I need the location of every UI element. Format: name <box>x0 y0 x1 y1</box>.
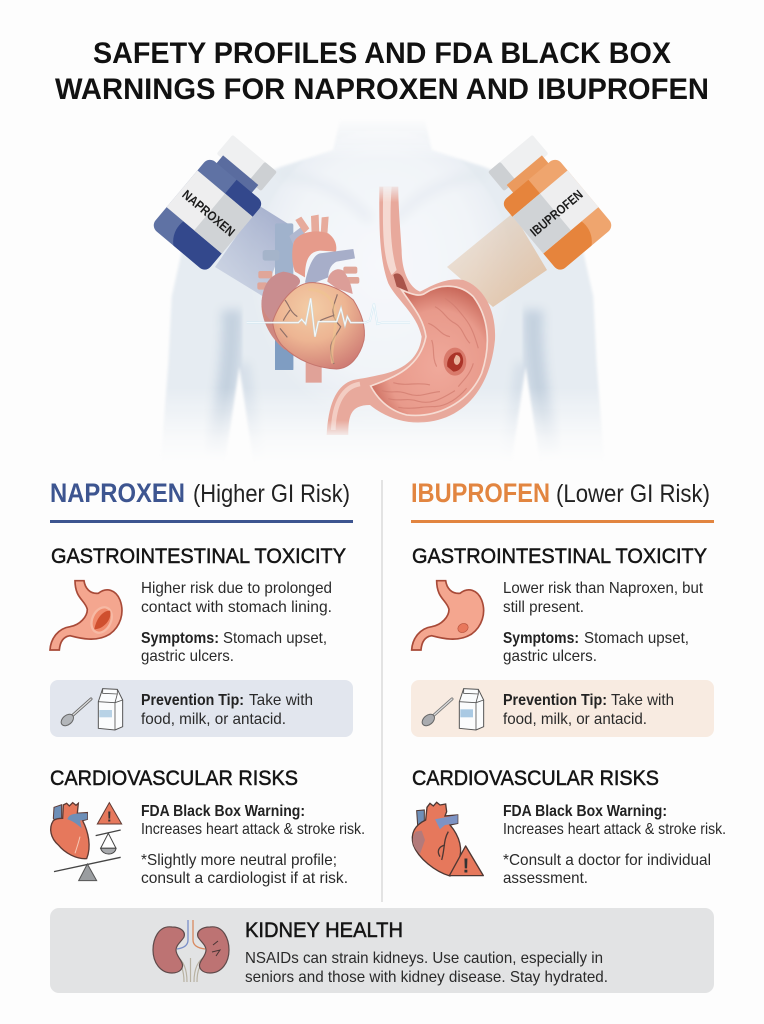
icon: heart, warning and balance scale: ! <box>107 810 112 826</box>
body text: symptoms: Symptoms: <box>503 630 579 647</box>
body text: symptoms: Symptoms: <box>141 630 219 647</box>
ibuprofen bottle: IBUPROFEN <box>527 187 586 239</box>
note text: consult a cardiologist if at risk. <box>141 870 348 887</box>
icon: heart with warning: ! <box>463 855 469 878</box>
tip text: Take with <box>611 692 674 709</box>
warning text: Increases heart attack & stroke risk. <box>141 821 365 838</box>
naproxen rule <box>50 520 353 523</box>
body text: risk: still present. <box>503 599 584 616</box>
body text: risk: Lower risk than Naproxen, but <box>503 580 704 597</box>
kidney heading: KIDNEY HEALTH <box>245 919 403 942</box>
panel: kidney health <box>50 908 714 993</box>
heading: gastrointestinal toxicity: GASTROINTESTINAL TOXICITY <box>412 545 707 568</box>
center divider <box>382 480 383 902</box>
heading: ibuprofen: IBUPROFEN <box>411 478 550 508</box>
kidney text: seniors and those with kidney disease. Stay hydrated. <box>245 969 608 986</box>
anatomical heart <box>247 215 410 383</box>
body text: symptoms: gastric ulcers. <box>503 648 597 665</box>
kidney text: NSAIDs can strain kidneys. Use caution, especially in <box>245 950 603 967</box>
tip text <box>141 692 313 728</box>
body text: risk <box>141 580 332 616</box>
tip text: Take with <box>249 692 313 709</box>
body text: symptoms: Stomach upset, <box>223 630 327 647</box>
note text: *Consult a doctor for individual <box>503 852 711 869</box>
ECG line <box>247 298 410 337</box>
icon: stomach with ulcer <box>50 581 122 650</box>
body text: risk <box>503 580 704 616</box>
warning text <box>503 803 726 838</box>
heading: cardiovascular risks: CARDIOVASCULAR RISKS <box>412 767 659 790</box>
body text: risk: contact with stomach lining. <box>141 599 332 616</box>
naproxen bottle <box>150 132 285 273</box>
heading: naproxen: (Higher GI Risk) <box>193 480 350 508</box>
note text: assessment. <box>503 870 588 887</box>
icon: kidneys <box>153 920 229 982</box>
callout: prevention tip <box>50 680 353 737</box>
beam: naproxen to heart <box>215 205 290 297</box>
kidney text <box>245 950 608 986</box>
heading: ibuprofen <box>411 478 710 508</box>
tip text: Prevention Tip: <box>503 692 607 709</box>
warning text: FDA Black Box Warning: <box>503 803 667 820</box>
note text: *Slightly more neutral profile; <box>141 852 337 869</box>
tip text: food, milk, or antacid. <box>503 711 647 728</box>
ibuprofen bottle <box>480 132 615 273</box>
note text <box>141 852 348 887</box>
heading: ibuprofen: (Lower GI Risk) <box>556 480 710 508</box>
body text: symptoms: Stomach upset, <box>584 630 689 647</box>
icon: spoon and milk carton <box>59 689 123 730</box>
tip text <box>503 692 674 728</box>
icon: heart with warning <box>412 802 483 878</box>
icon: heart, warning and balance scale <box>51 803 122 881</box>
icon: stomach with small ulcer <box>412 581 484 650</box>
torso figure <box>164 130 600 444</box>
anatomical stomach with ulcer <box>327 187 495 435</box>
body text: symptoms <box>503 630 689 665</box>
callout: prevention tip <box>411 680 714 737</box>
warning text: Increases heart attack & stroke risk. <box>503 821 726 838</box>
title: WARNINGS FOR NAPROXEN AND IBUPROFEN <box>55 73 709 106</box>
body text: risk: Higher risk due to prolonged <box>141 580 332 597</box>
tip text: food, milk, or antacid. <box>141 711 286 728</box>
title <box>55 37 709 106</box>
tip text: Prevention Tip: <box>141 692 244 709</box>
body text: symptoms <box>141 630 327 665</box>
beam: ibuprofen to stomach <box>447 213 547 307</box>
note text <box>503 852 711 887</box>
heading: naproxen: NAPROXEN <box>50 478 185 508</box>
hero illustration: torso with heart and stomach <box>154 130 612 444</box>
icon: spoon and milk carton <box>420 689 484 730</box>
body text: symptoms: gastric ulcers. <box>141 648 234 665</box>
naproxen bottle: NAPROXEN <box>179 187 238 239</box>
title: SAFETY PROFILES AND FDA BLACK BOX <box>93 37 671 70</box>
heading: cardiovascular risks: CARDIOVASCULAR RISKS <box>50 767 298 790</box>
ibuprofen rule <box>411 520 714 523</box>
warning text <box>141 803 365 838</box>
panel: ibuprofen <box>411 478 726 887</box>
warning text: FDA Black Box Warning: <box>141 803 305 820</box>
heading: naproxen <box>50 478 350 508</box>
heading: gastrointestinal toxicity: GASTROINTESTINAL TOXICITY <box>51 545 346 568</box>
panel: naproxen <box>50 478 365 887</box>
